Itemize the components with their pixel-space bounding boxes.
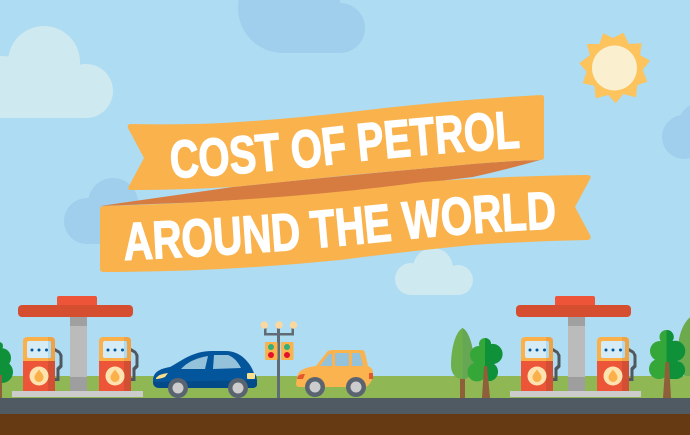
yellow car (296, 350, 373, 397)
title line 2: AROUND THE WORLD (124, 192, 555, 261)
road (0, 398, 690, 414)
grass (0, 376, 690, 398)
gas station: right (510, 296, 641, 397)
cloud: top left (0, 26, 113, 118)
blue car (153, 351, 257, 398)
tree: left edge (0, 342, 13, 398)
cloud: right edge (662, 103, 690, 159)
icon: sun (579, 33, 650, 103)
cloud: top centre (238, 0, 365, 53)
tree: round (468, 338, 503, 398)
ribbon fold (100, 160, 540, 206)
traffic light post (261, 321, 297, 398)
title line 1: COST OF PETROL (170, 112, 520, 178)
tree: tall (451, 328, 474, 398)
tree: right (649, 330, 685, 398)
ribbon: upper banner (128, 95, 544, 190)
gas station: left (12, 296, 143, 397)
ground (0, 414, 690, 435)
cloud: below ribbon (395, 248, 473, 295)
ribbon: lower banner (100, 175, 591, 272)
cloud: behind ribbon (64, 178, 138, 244)
tree: far right (676, 312, 690, 398)
